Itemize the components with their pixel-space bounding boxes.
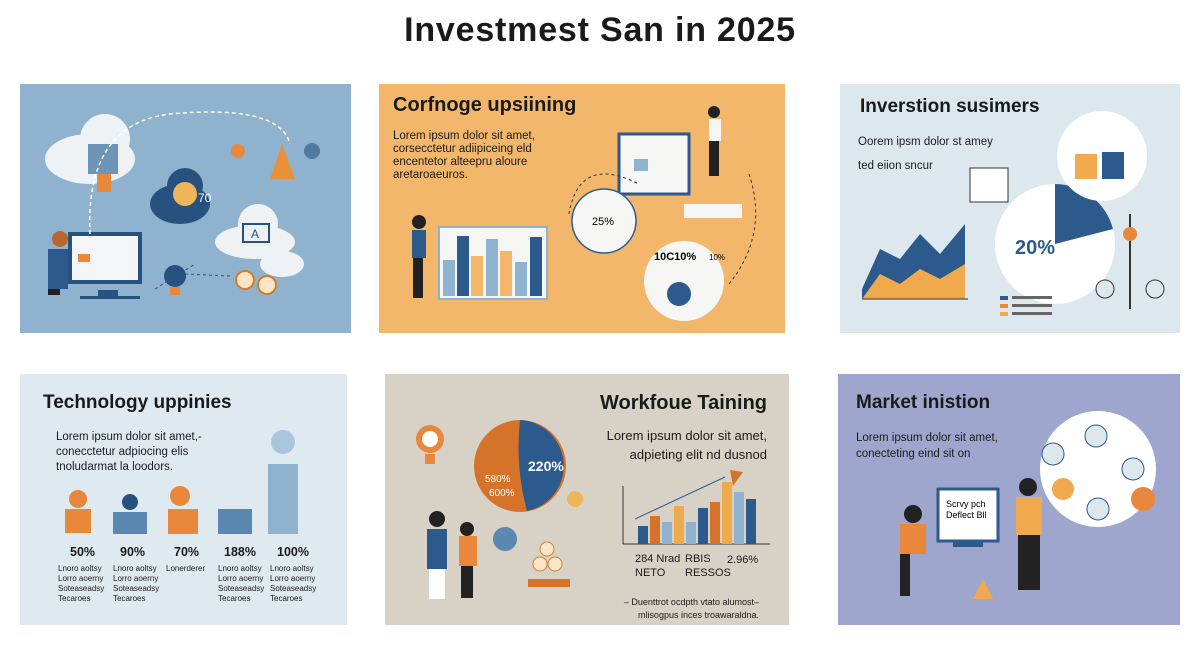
text block: conecctetur adpiocing elis <box>56 446 188 458</box>
text block: aretaroaeuros. <box>393 169 468 181</box>
stats row: Lorro aoerny <box>218 574 263 583</box>
panel: market insight <box>838 374 1180 625</box>
caption <box>624 597 759 620</box>
stats row: Soteaseadsy <box>58 584 104 593</box>
stats row: Tecaroes <box>58 594 90 603</box>
text block: tnoludarmat la loodors. <box>56 461 173 473</box>
chart: pie 20% <box>995 184 1115 304</box>
chart: area <box>862 168 1008 299</box>
callout: circle 10%: 10C10% <box>654 251 696 263</box>
panel: workforce training <box>385 374 789 625</box>
stats row: Soteaseadsy <box>113 584 159 593</box>
stats row: Lnoro aoltsy <box>58 564 102 573</box>
panel: workforce training: 2.96% <box>727 554 758 566</box>
icon: people circle <box>1057 111 1147 201</box>
chart: pie 20%: 20% <box>1015 237 1055 259</box>
stats row: Soteaseadsy <box>270 584 316 593</box>
icon: cloud A: A <box>251 227 259 241</box>
icon: computer users <box>900 478 1042 599</box>
icon: cloud brain <box>45 114 135 192</box>
title: Investmest San in 2025 <box>404 11 796 49</box>
bar chart <box>623 470 770 544</box>
text block: Lorem ipsum dolor sit amet,- <box>56 431 202 443</box>
text block: Lorem ipsum dolor sit amet, <box>607 428 767 443</box>
caption: – Duenttrot ocdpth vtato alumost– <box>624 597 759 607</box>
text block <box>56 431 202 473</box>
stats row: 188% <box>224 545 256 559</box>
panel: workforce training: 284 Nrad <box>635 553 680 565</box>
text block <box>607 428 767 462</box>
panel: workforce training: RBIS <box>685 553 711 565</box>
callout: circle 10%: 10% <box>709 253 725 262</box>
panel: investment summary <box>840 84 1180 333</box>
panel: cloud technology <box>20 84 351 333</box>
text block: conecteting eind sit on <box>856 448 970 460</box>
callout: circle 10% <box>644 241 725 321</box>
icon: monitor with person <box>619 106 742 218</box>
legend <box>1000 296 1052 316</box>
caption: mlisogpus inces troawaraldna. <box>638 610 759 620</box>
stats row: 50% <box>70 545 95 559</box>
icons row <box>65 430 298 534</box>
text block: corsecctetur adiipiceing eld <box>393 143 532 155</box>
stats row: 100% <box>277 545 309 559</box>
stats row: Lnoro aoltsy <box>218 564 262 573</box>
stats row: Tecaroes <box>218 594 250 603</box>
icon: people <box>427 511 477 599</box>
stats row: Lonerderer <box>166 564 205 573</box>
text block: adpieting elit nd dusnod <box>630 447 767 462</box>
text block <box>858 136 993 172</box>
heading: Technology uppinies <box>43 392 232 413</box>
stats row <box>58 545 316 603</box>
stats row: Tecaroes <box>270 594 302 603</box>
icon: bulb gear <box>416 425 583 507</box>
heading: Corfnoge upsiining <box>393 94 576 116</box>
stats row: 90% <box>120 545 145 559</box>
icon: computer users: Deflect Bll <box>946 510 987 520</box>
icon: bulb and coins <box>164 265 276 295</box>
chart: pie <box>474 420 566 512</box>
panel: workforce training: NETO <box>635 567 665 579</box>
chart: pie: 600% <box>489 488 515 499</box>
text block <box>393 130 535 181</box>
icon: computer and person <box>48 231 142 299</box>
panel: corporate upskilling <box>379 84 785 333</box>
heading: Inverstion susimers <box>860 96 1040 117</box>
callout: circle 25%: 25% <box>592 216 614 228</box>
icon: computer users: Scrvy pch <box>946 499 986 509</box>
icon: dark cloud bulb <box>150 168 212 224</box>
stats row: Lorro aoerny <box>113 574 158 583</box>
stats row: Lnoro aoltsy <box>113 564 157 573</box>
icon: coins <box>493 527 570 587</box>
text block: encentetor alteepru aloure <box>393 156 527 168</box>
text block: Oorem ipsm dolor st amey <box>858 136 993 148</box>
text block: Lorem ipsum dolor sit amet, <box>393 130 535 142</box>
icon: cloud A <box>215 204 304 277</box>
icon: scale <box>1096 214 1164 309</box>
icon: dark cloud bulb: 70 <box>198 191 212 205</box>
bar chart <box>439 227 547 299</box>
icon: people circle <box>1040 411 1156 527</box>
stats row: 70% <box>174 545 199 559</box>
icon: presenter <box>412 215 426 298</box>
stats row: Tecaroes <box>113 594 145 603</box>
stats row: Lorro aoerny <box>270 574 315 583</box>
panel: technology upgrades <box>20 374 347 625</box>
text block: ted eiion sncur <box>858 160 933 172</box>
chart: pie: 580% <box>485 474 511 485</box>
callout: circle 25% <box>572 189 636 253</box>
text block <box>856 432 998 460</box>
panel: workforce training: RESSOS <box>685 567 731 579</box>
stats row: Lnoro aoltsy <box>270 564 314 573</box>
heading: Market inistion <box>856 392 990 413</box>
chart: pie: 220% <box>528 458 564 474</box>
text block: Lorem ipsum dolor sit amet, <box>856 432 998 444</box>
icon: cone <box>231 143 320 179</box>
stats row: Lorro aoerny <box>58 574 103 583</box>
heading: Workfoue Taining <box>600 392 767 414</box>
stats row: Soteaseadsy <box>218 584 264 593</box>
